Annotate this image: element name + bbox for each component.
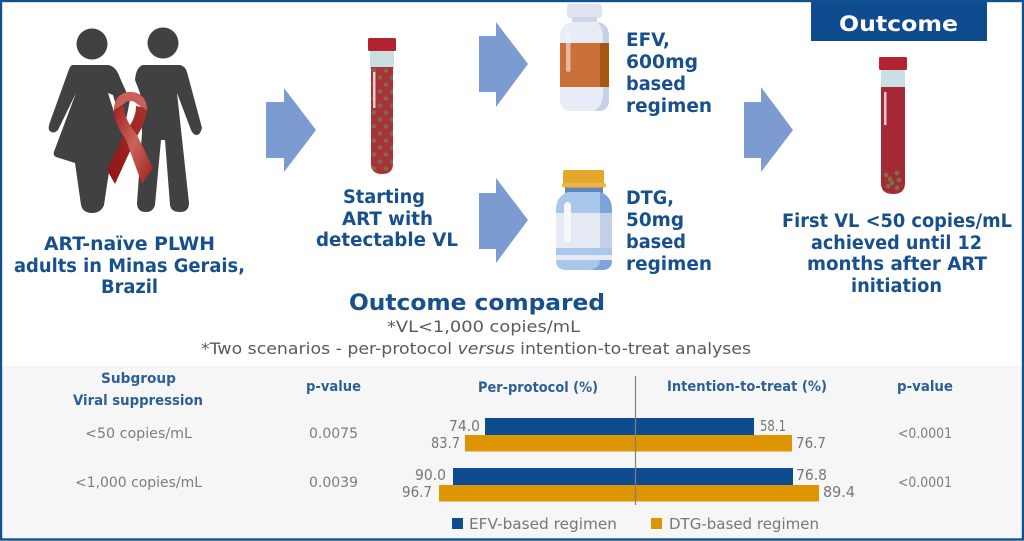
label: EFV regimen: EFV,: [626, 30, 670, 51]
table headers: Viral suppression: [73, 393, 203, 409]
table headers: Subgroup: [101, 371, 176, 387]
arrow: to EFV regimen: [479, 22, 528, 107]
table row: below 1,000 copies: [75, 475, 952, 491]
table row: below 50 copies: [85, 426, 952, 442]
label: outcome description: achieved until 12: [811, 233, 982, 254]
table row: below 1,000 copies: <1,000 copies/mL: [75, 475, 202, 491]
bar values: per-protocol: 74.0: [449, 417, 480, 435]
label: EFV regimen: 600mg: [626, 52, 698, 73]
table headers: p-value: [306, 379, 361, 395]
diverging bar chart: [402, 376, 855, 505]
table row: below 50 copies: 0.0075: [309, 426, 358, 442]
icon: DTG pill bottle: [556, 170, 612, 270]
label: outcome description: initiation: [851, 276, 942, 297]
heading: Outcome banner: [811, 0, 987, 41]
label: population: ART-naïve PLWH: [44, 234, 215, 255]
label: EFV regimen: regimen: [626, 96, 712, 117]
label: EFV regimen: [626, 30, 712, 117]
table headers: [73, 371, 953, 409]
legend item: DTG: DTG-based regimen: [669, 515, 819, 533]
icon: blood tube with many virus particles: [368, 38, 396, 174]
table row: below 1,000 copies: <0.0001: [898, 475, 952, 491]
table headers: Intention-to-treat (%): [667, 379, 827, 395]
label: EFV regimen: based: [626, 74, 686, 95]
bar values: per-protocol: 96.7: [402, 483, 432, 501]
label: starting ART: ART with: [342, 209, 433, 230]
bar values: per-protocol: [402, 417, 480, 501]
table row: below 50 copies: <0.0001: [898, 426, 952, 442]
icon: blood tube with few virus particles: [879, 57, 907, 194]
bars: EFV-based regimen: [453, 418, 793, 485]
heading: Outcome banner: Outcome: [839, 12, 958, 36]
grey table panel background: [2, 366, 1022, 539]
label: DTG regimen: DTG,: [626, 188, 674, 209]
legend: [452, 515, 819, 533]
label: population: [14, 234, 245, 298]
label: outcome description: months after ART: [807, 254, 987, 275]
label: outcome description: First VL <50 copies/mL: [782, 211, 1012, 232]
label: starting ART: Starting: [343, 187, 425, 208]
table headers: Per-protocol (%): [478, 380, 598, 396]
icon: EFV pill bottle: [560, 4, 609, 111]
icon: awareness ribbon: [107, 92, 153, 184]
arrow: to outcome: [744, 87, 793, 172]
note: two scenarios: *Two scenarios - per-protocol versus intention-to-treat analyses: [201, 339, 751, 358]
label: outcome description: [782, 211, 1012, 297]
label: DTG regimen: [626, 188, 712, 275]
legend item: EFV: EFV-based regimen: [469, 515, 617, 533]
table row: below 50 copies: <50 copies/mL: [85, 426, 192, 442]
table row: below 1,000 copies: 0.0039: [309, 475, 358, 491]
bar values: intention-to-treat: [760, 417, 855, 501]
icon: couple with red ribbon: [49, 28, 202, 213]
icon: woman silhouette: [49, 28, 130, 213]
label: starting ART: detectable VL: [316, 230, 458, 251]
note: VL threshold: *VL<1,000 copies/mL: [387, 317, 580, 336]
label: DTG regimen: regimen: [626, 254, 712, 275]
arrow: to DTG regimen: [479, 178, 528, 263]
label: population: Brazil: [101, 277, 158, 298]
bar values: per-protocol: 90.0: [415, 466, 446, 484]
bar values: intention-to-treat: 76.7: [796, 434, 826, 452]
icon: man silhouette: [135, 28, 202, 212]
label: starting ART: [316, 187, 458, 251]
table headers: p-value: [897, 379, 953, 395]
bar values: intention-to-treat: 89.4: [823, 483, 855, 501]
arrow: population to starting ART: [266, 88, 316, 172]
bar values: intention-to-treat: 58.1: [760, 417, 786, 435]
heading: Outcome compared: Outcome compared: [349, 291, 605, 316]
bar values: per-protocol: 83.7: [431, 434, 460, 452]
label: DTG regimen: based: [626, 232, 686, 253]
label: DTG regimen: 50mg: [626, 210, 684, 231]
bars: DTG-based regimen: [439, 435, 819, 502]
bar values: intention-to-treat: 76.8: [796, 466, 827, 484]
label: population: adults in Minas Gerais,: [14, 256, 245, 277]
